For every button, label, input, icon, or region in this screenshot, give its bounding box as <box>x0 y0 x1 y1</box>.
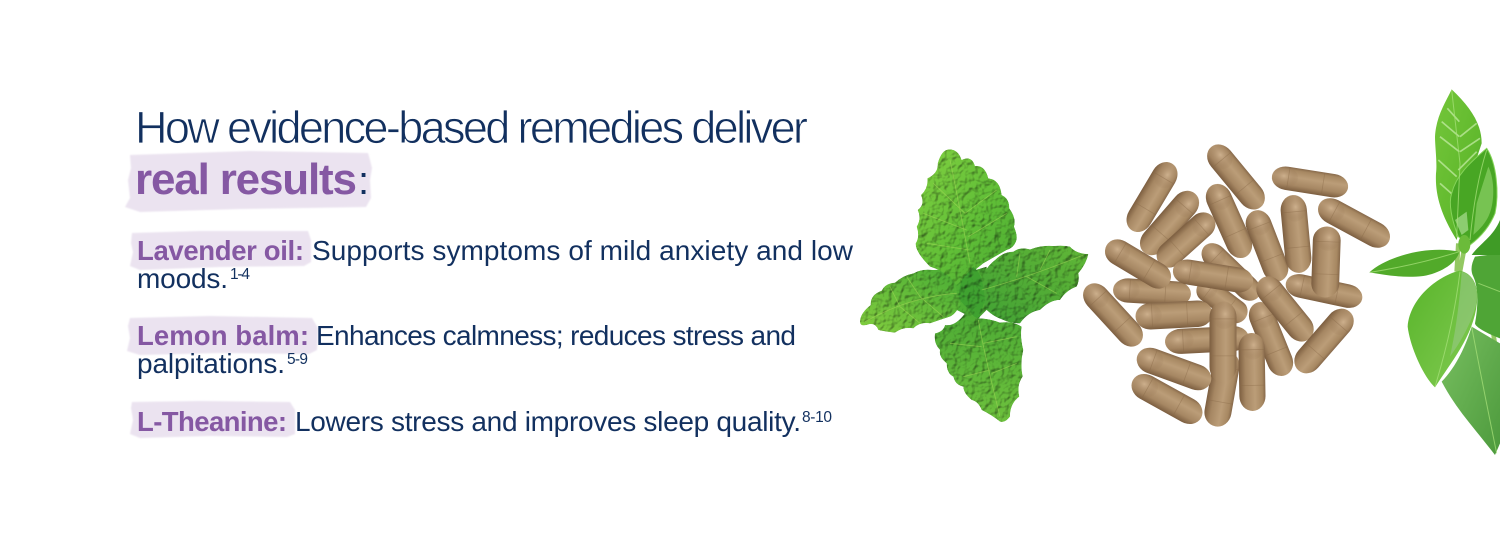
capsule group upper <box>1121 157 1183 237</box>
title line 1: How evidence-based remedies deliver <box>135 102 808 153</box>
lavender text line 2: moods. <box>137 263 228 294</box>
leaf: horizontal <box>1369 250 1459 277</box>
sprig leaves <box>860 149 1088 422</box>
leaf: right behind <box>1472 253 1500 338</box>
item: lemon balm <box>127 316 796 379</box>
lemon balm references: 5-9 <box>287 351 308 368</box>
leaf: bottom <box>935 313 1023 422</box>
leaf: large lower <box>1408 271 1477 387</box>
highlight on large lower leaf <box>1450 272 1477 357</box>
title <box>125 102 808 212</box>
leaf: bottom right <box>1442 327 1500 455</box>
bud <box>1458 235 1470 254</box>
title line 2: real results <box>135 155 357 204</box>
tea plant image <box>1369 89 1500 455</box>
leaf: right <box>982 246 1088 323</box>
item: lavender oil <box>130 231 854 294</box>
capsule group middle <box>1112 277 1192 307</box>
l-theanine text: Lowers stress and improves sleep quality. <box>295 406 801 437</box>
l-theanine label: L-Theanine: <box>137 406 287 437</box>
lemon balm sprig image <box>860 149 1088 422</box>
plant veins <box>1370 90 1500 453</box>
highlight on top front leaf <box>1473 167 1493 235</box>
leaf: top front <box>1450 148 1497 245</box>
lavender text: Supports symptoms of mild anxiety and low <box>312 235 854 266</box>
capsules pile <box>1077 139 1395 429</box>
lemon balm text line 2: palpitations. <box>137 348 285 379</box>
streaks on top back leaf <box>1438 108 1480 197</box>
reflection on top front leaf <box>1455 212 1468 235</box>
item: l-theanine <box>130 401 832 438</box>
leaf: top back <box>1435 89 1482 240</box>
capsule group lower <box>1202 349 1242 429</box>
leaf: left <box>860 270 961 333</box>
l-theanine references: 8-10 <box>802 409 832 426</box>
sprig veins <box>865 160 1083 417</box>
lemon balm label: Lemon balm: <box>137 320 309 351</box>
title highlight brush <box>125 151 372 212</box>
sprig center fill <box>953 267 990 320</box>
title colon: : <box>358 159 369 203</box>
lavender label: Lavender oil: <box>137 235 304 266</box>
leaf: center small <box>959 267 985 318</box>
plant stems <box>1457 243 1500 380</box>
lemon balm highlight brush <box>127 316 318 355</box>
back capsules <box>1192 274 1252 328</box>
l-theanine highlight brush <box>130 401 295 438</box>
lavender highlight brush <box>130 231 311 270</box>
leaf: top <box>916 149 1017 285</box>
leaf: right small <box>1472 220 1500 255</box>
lavender references: 1-4 <box>230 266 250 283</box>
lemon balm text: Enhances calmness; reduces stress and <box>316 320 796 351</box>
